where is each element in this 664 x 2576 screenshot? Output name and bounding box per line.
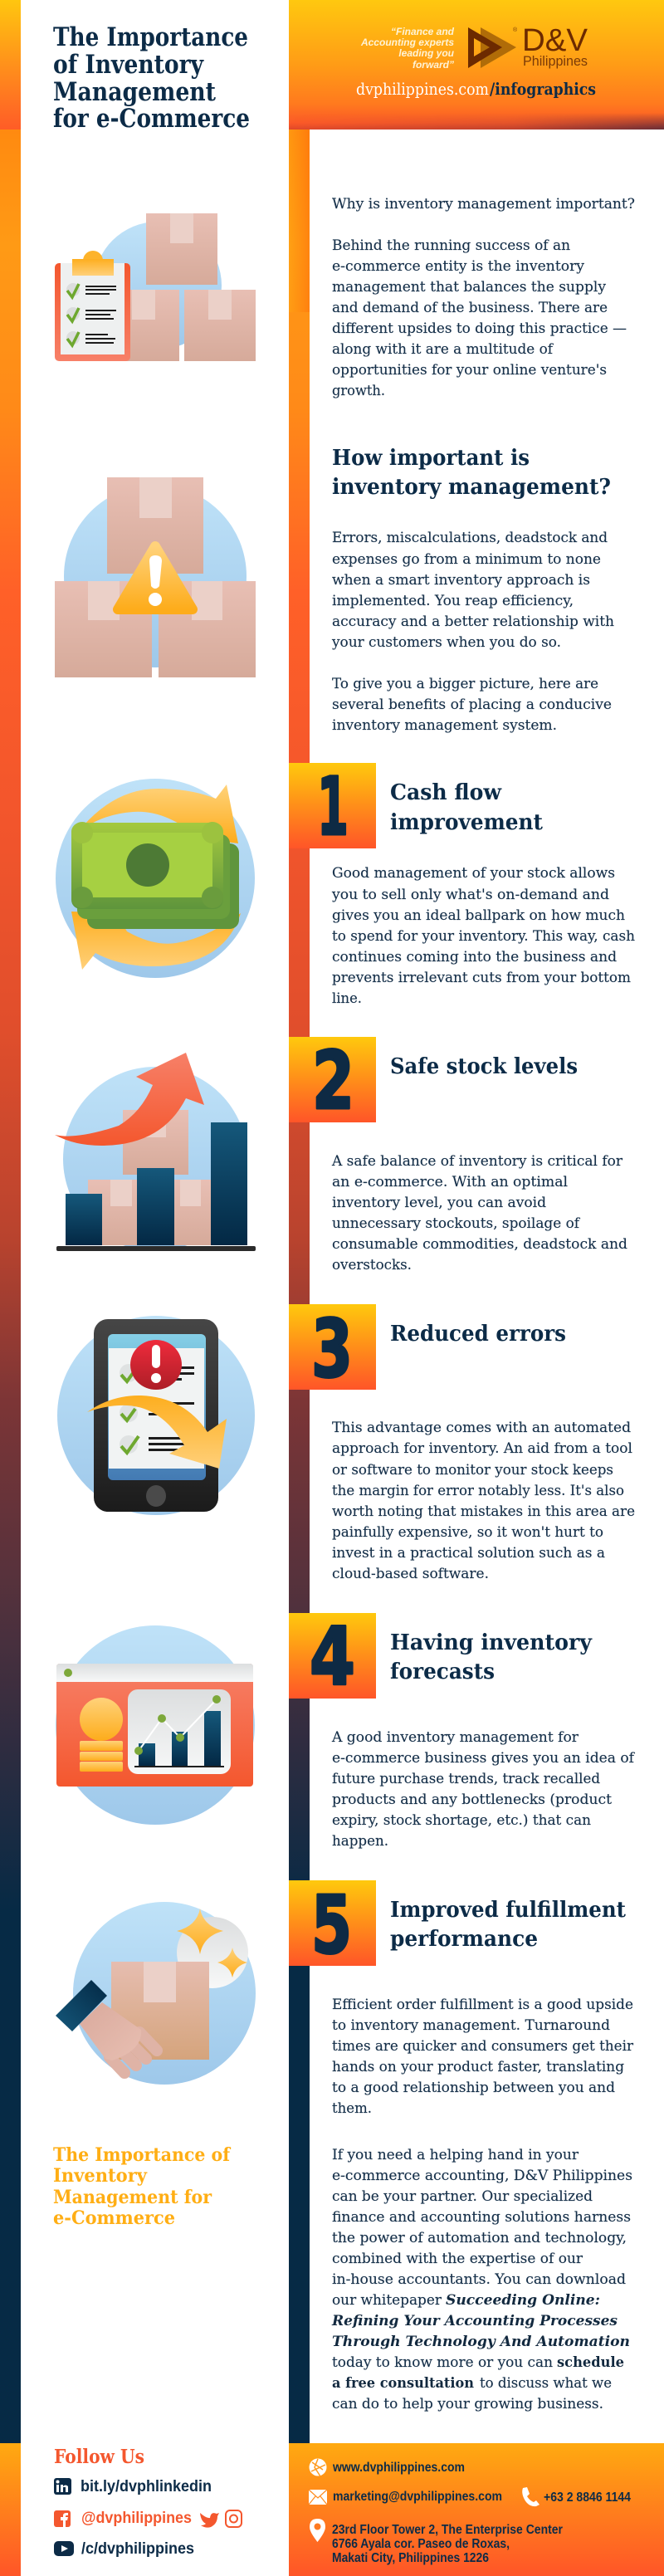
tagline: “Finance and	[391, 26, 455, 37]
text: closing call to action: Succeeding Online:	[446, 2292, 600, 2309]
URL	[356, 79, 596, 99]
text 2: consumable commodities, deadstock and	[332, 1236, 627, 1253]
icon: mail	[309, 2490, 327, 2505]
address: 23rd Floor Tower 2, The Enterprise Center	[332, 2523, 563, 2537]
text: closing call to action: in-house accountants. You can download	[332, 2271, 626, 2288]
URL: dvphilippines.com	[356, 79, 489, 99]
follow us block: Follow Us	[54, 2446, 144, 2468]
text: closing call to action: can be your partner. Our specialized	[332, 2188, 593, 2205]
text 2: overstocks.	[332, 1257, 412, 1273]
tagline	[360, 26, 455, 71]
text 4: expiry, stock shortage, etc.) that can	[332, 1812, 591, 1829]
text 1	[331, 865, 635, 1007]
right strip top glow	[289, 130, 310, 312]
follow us block: bit.ly/dvphlinkedin	[81, 2477, 212, 2495]
icon: hand with box and sparkles	[56, 1902, 256, 2085]
icon: stock chart with arrow	[55, 1053, 256, 1251]
title: The Importance	[53, 22, 248, 52]
text: closing call to action: Refining Your Accounting Processes	[331, 2313, 618, 2329]
closing title	[53, 2144, 231, 2229]
text: closing call to action: the power of automation and technology,	[332, 2230, 627, 2246]
right gradient strip	[289, 130, 310, 2443]
heading 1: Cash flow	[390, 780, 502, 805]
heading: how important: How important is	[332, 446, 530, 471]
intro text: Why is inventory management important?	[332, 196, 635, 213]
text: how important body: expenses go from a minimum to none	[332, 551, 601, 568]
icon: money cycle	[56, 779, 255, 978]
logo wordmark: D&V	[522, 23, 588, 58]
address: Makati City, Philippines 1226	[332, 2551, 489, 2565]
text: closing call to action: If you need a helping hand in your	[332, 2147, 579, 2163]
text 4: e-commerce business gives you an idea of	[332, 1750, 636, 1767]
text 5: them.	[332, 2100, 372, 2117]
tagline: leading you	[398, 47, 455, 59]
text: how important body: accuracy and a better relationship with	[332, 613, 614, 630]
text 3: This advantage comes with an automated	[332, 1420, 631, 1436]
intro text: e-commerce entity is the inventory	[332, 258, 584, 275]
heading 4: Having inventory	[390, 1630, 593, 1655]
icon: linkedin	[54, 2478, 71, 2495]
text 2	[331, 1153, 627, 1273]
text 1: continues coming into the business and	[332, 949, 617, 965]
text 3: or software to monitor your stock keeps	[332, 1462, 613, 1479]
intro text: along with it are a multitude of	[332, 341, 554, 358]
text 4: future purchase trends, track recalled	[332, 1771, 600, 1787]
left strip footer	[0, 2443, 21, 2576]
tagline: Accounting experts	[360, 37, 454, 48]
text 3	[332, 1420, 635, 1582]
intro text: management that balances the supply	[332, 279, 606, 296]
text 4: products and any bottlenecks (product	[332, 1791, 612, 1808]
text: closing call to action: can do to help your growing business.	[332, 2396, 603, 2412]
text 4: happen.	[332, 1833, 388, 1850]
heading 1	[390, 780, 543, 835]
text 5	[332, 1997, 634, 2117]
heading: how important: inventory management?	[332, 475, 611, 500]
text 3: approach for inventory. An aid from a tool	[332, 1440, 632, 1457]
number badge 5: 5	[311, 1879, 352, 1972]
title: Management	[53, 77, 217, 107]
contact panel: marketing@dvphilippines.com	[333, 2490, 502, 2504]
text: closing call to action: Through Technology And Automation	[332, 2334, 630, 2350]
text: closing call to action	[331, 2147, 632, 2412]
text 2: A safe balance of inventory is critical for	[331, 1153, 623, 1170]
icon: youtube	[54, 2541, 74, 2556]
text 5: hands on your product faster, translating	[332, 2059, 624, 2075]
address: 6766 Ayala cor. Paseo de Roxas,	[332, 2537, 510, 2551]
text: how important body: when a smart inventory approach is	[332, 572, 590, 589]
text: closing call to action: e-commerce accounting, D&V Philippines	[332, 2168, 632, 2184]
contact panel	[289, 2443, 664, 2576]
text 3: worth noting that mistakes in this area are	[332, 1503, 635, 1520]
contact panel: +63 2 8846 1144	[544, 2490, 631, 2505]
text 3: painfully expensive, so it won't hurt to	[332, 1524, 603, 1541]
text: closing call to action: today to know more or you can	[332, 2354, 553, 2371]
text: closing call to action: combined with the expertise of our	[332, 2251, 583, 2267]
text 3: cloud-based software.	[332, 1566, 489, 1582]
icon: clipboard and boxes	[55, 213, 256, 361]
text: closing call to action: our whitepaper	[332, 2292, 442, 2309]
text 1: prevents irrelevant cuts from your bottom	[332, 970, 631, 986]
text: how important body: several benefits of placing a conducive	[332, 697, 612, 713]
text 1: Good management of your stock allows	[332, 865, 615, 882]
text 1: gives you an ideal ballpark on how much	[332, 907, 625, 924]
number badge 3	[289, 1303, 376, 1396]
title: of Inventory	[53, 50, 204, 80]
heading 5: performance	[390, 1927, 538, 1952]
text: how important body: inventory management system.	[332, 717, 557, 734]
title: for e-Commerce	[53, 104, 250, 134]
intro text: and demand of the business. There are	[332, 300, 608, 316]
text 4: A good inventory management for	[331, 1729, 579, 1746]
contact panel: www.dvphilippines.com	[332, 2461, 465, 2475]
text 1: you to sell only what's on-demand and	[331, 887, 609, 903]
closing title: Inventory	[53, 2165, 148, 2187]
text: closing call to action: schedule	[557, 2354, 624, 2371]
icon: forecast window	[56, 1625, 255, 1825]
text: closing call to action: finance and accounting solutions harness	[332, 2209, 631, 2226]
icon: facebook	[54, 2510, 71, 2527]
logo wordmark: ®	[513, 27, 518, 33]
left gradient strip	[0, 130, 21, 2443]
closing title: The Importance of	[53, 2144, 231, 2166]
logo wordmark: Philippines	[523, 53, 588, 69]
icon: location pin	[310, 2519, 325, 2542]
intro text: different upsides to doing this practice —	[332, 320, 627, 337]
number badge 1: 1	[317, 760, 349, 853]
intro text: Behind the running success of an	[332, 237, 570, 254]
closing title: Management for	[53, 2187, 212, 2208]
intro text: growth.	[332, 383, 385, 399]
icon: twitter	[200, 2513, 219, 2528]
heading 4: forecasts	[390, 1659, 495, 1684]
logo mark	[468, 27, 516, 68]
text 1: line.	[332, 990, 362, 1007]
text 4	[331, 1729, 636, 1850]
follow us block: /c/dvphilippines	[81, 2539, 194, 2558]
heading 3: Reduced errors	[390, 1322, 566, 1347]
heading 5	[390, 1898, 626, 1952]
text 5: to a good relationship between you and	[332, 2080, 615, 2096]
icon: instagram	[226, 2510, 242, 2527]
number badge 2	[289, 1034, 376, 1127]
header panel: logo and URL	[289, 0, 664, 130]
text 3: the margin for error notably less. It's also	[332, 1483, 624, 1499]
text 5: to inventory management. Turnaround	[332, 2017, 610, 2034]
number badge 5	[289, 1879, 376, 1972]
text: how important body: Errors, miscalculations, deadstock and	[332, 530, 608, 546]
title	[53, 22, 250, 134]
text 1: to spend for your inventory. This way, cash	[332, 928, 635, 945]
follow us block: @dvphilippines	[81, 2509, 192, 2527]
text: closing call to action: a free consultation	[332, 2375, 474, 2392]
intro text: opportunities for your online venture's	[332, 362, 607, 379]
heading 2: Safe stock levels	[390, 1054, 578, 1079]
text: closing call to action: to discuss what we	[480, 2375, 612, 2392]
heading 5: Improved fulfillment	[390, 1898, 626, 1923]
icon: phone	[522, 2487, 540, 2506]
text 2: inventory level, you can avoid	[332, 1195, 546, 1211]
follow us block	[54, 2446, 242, 2558]
text 2: unnecessary stockouts, spoilage of	[332, 1215, 581, 1232]
text 5: Efficient order fulfillment is a good upside	[332, 1997, 633, 2013]
icon: globe	[309, 2459, 327, 2476]
URL: /infographics	[490, 79, 596, 99]
text: how important body	[331, 530, 614, 734]
heading 4	[390, 1630, 593, 1684]
icon: phone with alert	[57, 1316, 255, 1515]
address	[332, 2523, 563, 2565]
closing title: e-Commerce	[53, 2207, 175, 2229]
icon: boxes with warning	[55, 477, 256, 677]
text 2: an e-commerce. With an optimal	[332, 1174, 568, 1190]
tagline: forward”	[413, 59, 454, 71]
text: how important body: implemented. You reap efficiency,	[332, 593, 574, 609]
number badge 3: 3	[311, 1303, 353, 1396]
text: how important body: your customers when you do so.	[331, 634, 561, 651]
number badge 1	[289, 760, 376, 853]
number badge 4	[289, 1611, 376, 1703]
intro text	[332, 196, 635, 399]
number badge 4: 4	[310, 1611, 355, 1703]
left strip header	[0, 0, 21, 130]
text 3: invest in a practical solution such as a	[332, 1545, 605, 1562]
text: how important body: To give you a bigger picture, here are	[332, 676, 598, 692]
heading 1: improvement	[390, 810, 543, 835]
heading: how important	[332, 446, 611, 500]
number badge 2: 2	[312, 1034, 354, 1127]
text 5: times are quicker and consumers get their	[332, 2038, 634, 2055]
logo wordmark	[513, 23, 588, 69]
